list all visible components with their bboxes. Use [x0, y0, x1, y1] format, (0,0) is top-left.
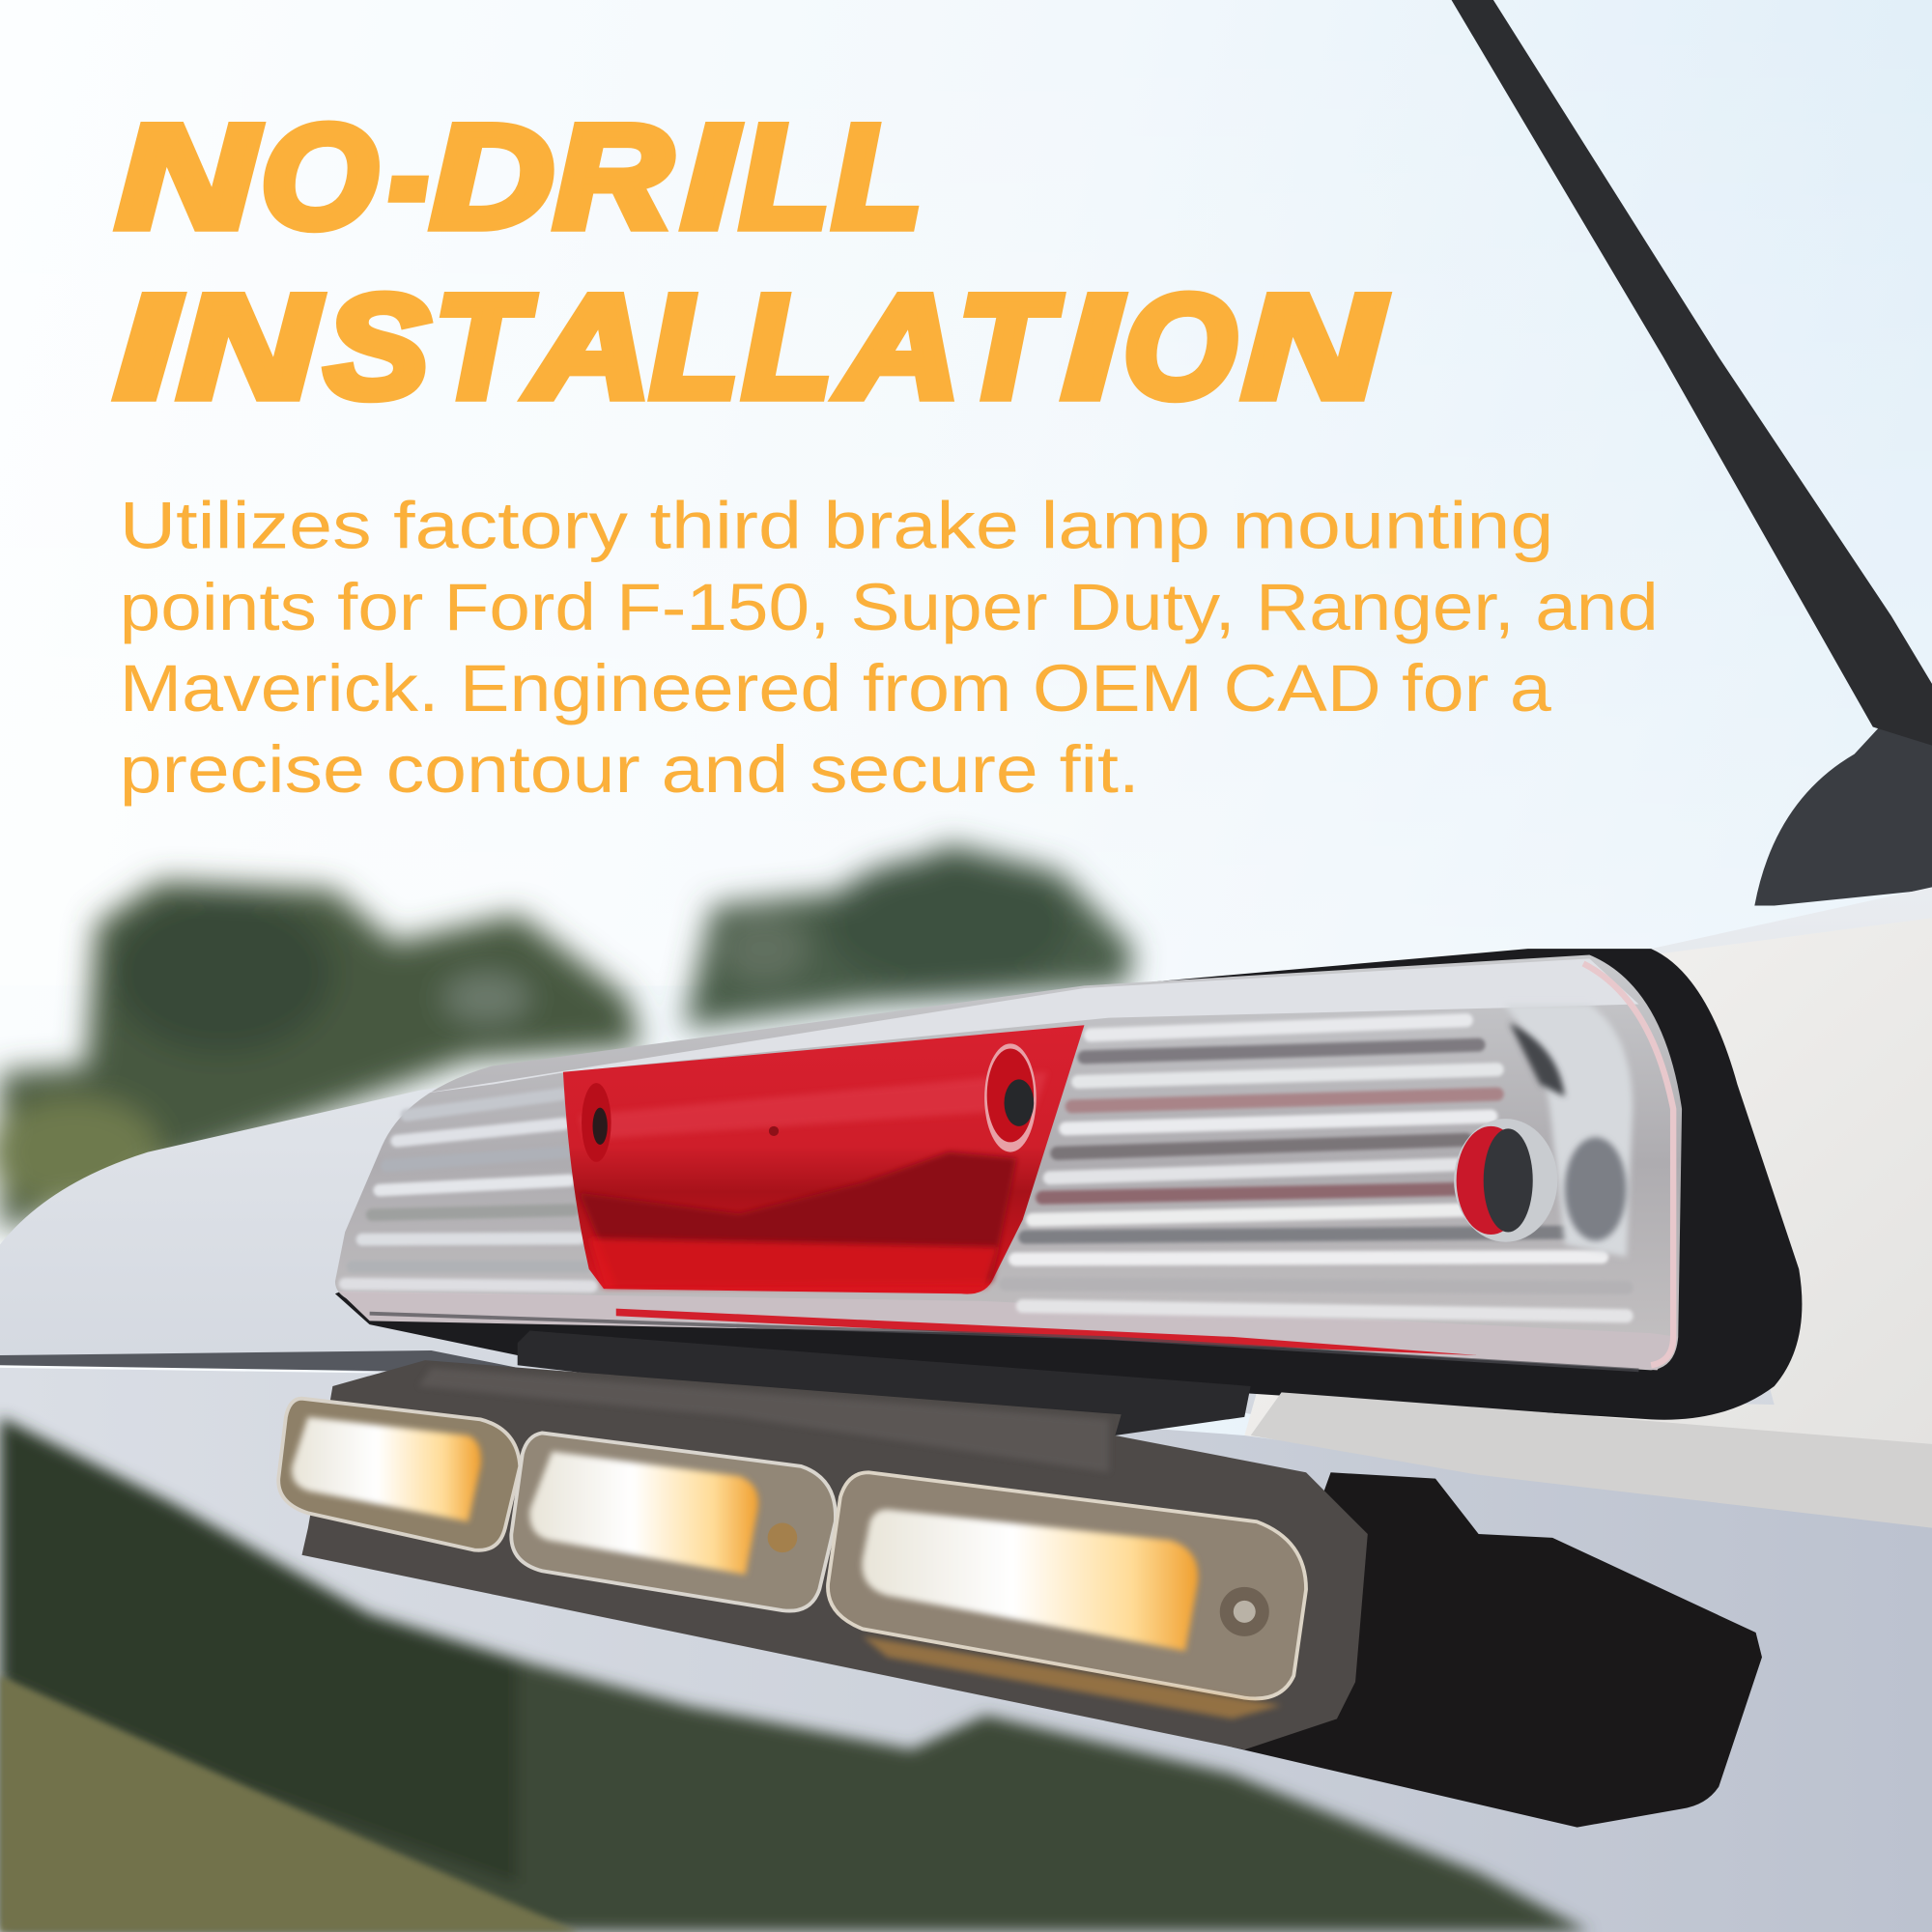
heading: A: [526, 266, 650, 428]
heading: L: [741, 96, 829, 258]
heading: L: [833, 96, 922, 258]
heading: I: [683, 96, 738, 258]
right clear ribs: [1006, 1020, 1627, 1316]
heading: I: [116, 266, 180, 428]
heading: A: [836, 266, 960, 428]
blurred background trees: [0, 844, 1133, 1233]
upper dark mount bar: [518, 1331, 1251, 1435]
body text: [120, 489, 1659, 807]
bracket light sheen: [419, 1368, 1109, 1472]
heading: L: [650, 266, 738, 428]
heading: D: [431, 96, 554, 258]
antenna mast: [1452, 0, 1932, 746]
left clear ribs: [345, 1094, 591, 1287]
lamp housing: [335, 955, 1682, 1370]
heading: [116, 96, 1385, 428]
heading: R: [554, 96, 671, 258]
LED module 3: [828, 1472, 1306, 1698]
white cab corner panel: [1244, 918, 1932, 1516]
heading: L: [743, 266, 832, 428]
amber glow on bracket: [863, 1636, 1282, 1719]
heading: N: [117, 96, 259, 258]
lower body reflection: [0, 1368, 1932, 1932]
third brake lamp: [335, 955, 1682, 1370]
body text: points for Ford F-150, Super Duty, Ranger, and: [120, 570, 1659, 644]
antenna base: [1754, 721, 1932, 906]
reflected grass band: [0, 1676, 579, 1932]
heading: O: [1123, 266, 1236, 428]
right mount bolt: [1454, 1119, 1627, 1242]
black lamp gasket: [335, 949, 1802, 1420]
lamp outer rim: [1583, 963, 1673, 1365]
white trim below lamp: [1251, 1392, 1932, 1528]
left red mount hole: [582, 1083, 611, 1162]
body text: Utilizes factory third brake lamp mounting: [120, 489, 1553, 563]
heading: -: [389, 96, 428, 258]
truck cab body: [0, 887, 1932, 1534]
heading: O: [261, 96, 377, 258]
LED module 1: [278, 1399, 520, 1550]
metal LED mounting bracket: [301, 1360, 1368, 1749]
heading: T: [435, 266, 534, 428]
heading: N: [1243, 266, 1385, 428]
body text: precise contour and secure fit.: [120, 732, 1140, 807]
body text: Maverick. Engineered from OEM CAD for a: [120, 651, 1552, 725]
red centre lens: [563, 1025, 1084, 1294]
right red mount hole: [984, 1043, 1037, 1152]
lamp bottom trim: [339, 1292, 1678, 1370]
body crease line: [0, 1350, 518, 1372]
heading: I: [1064, 266, 1122, 428]
LED module 2: [511, 1433, 836, 1611]
lamp top highlight: [419, 958, 1638, 1094]
dark reflection in red lens: [579, 1152, 1016, 1284]
black rear bracket: [1233, 1472, 1762, 1828]
reflected trees: [0, 1417, 1589, 1932]
heading: S: [326, 266, 429, 428]
heading: N: [179, 266, 321, 428]
lamp inner reflector: [1503, 1005, 1633, 1257]
heading: T: [958, 266, 1061, 428]
